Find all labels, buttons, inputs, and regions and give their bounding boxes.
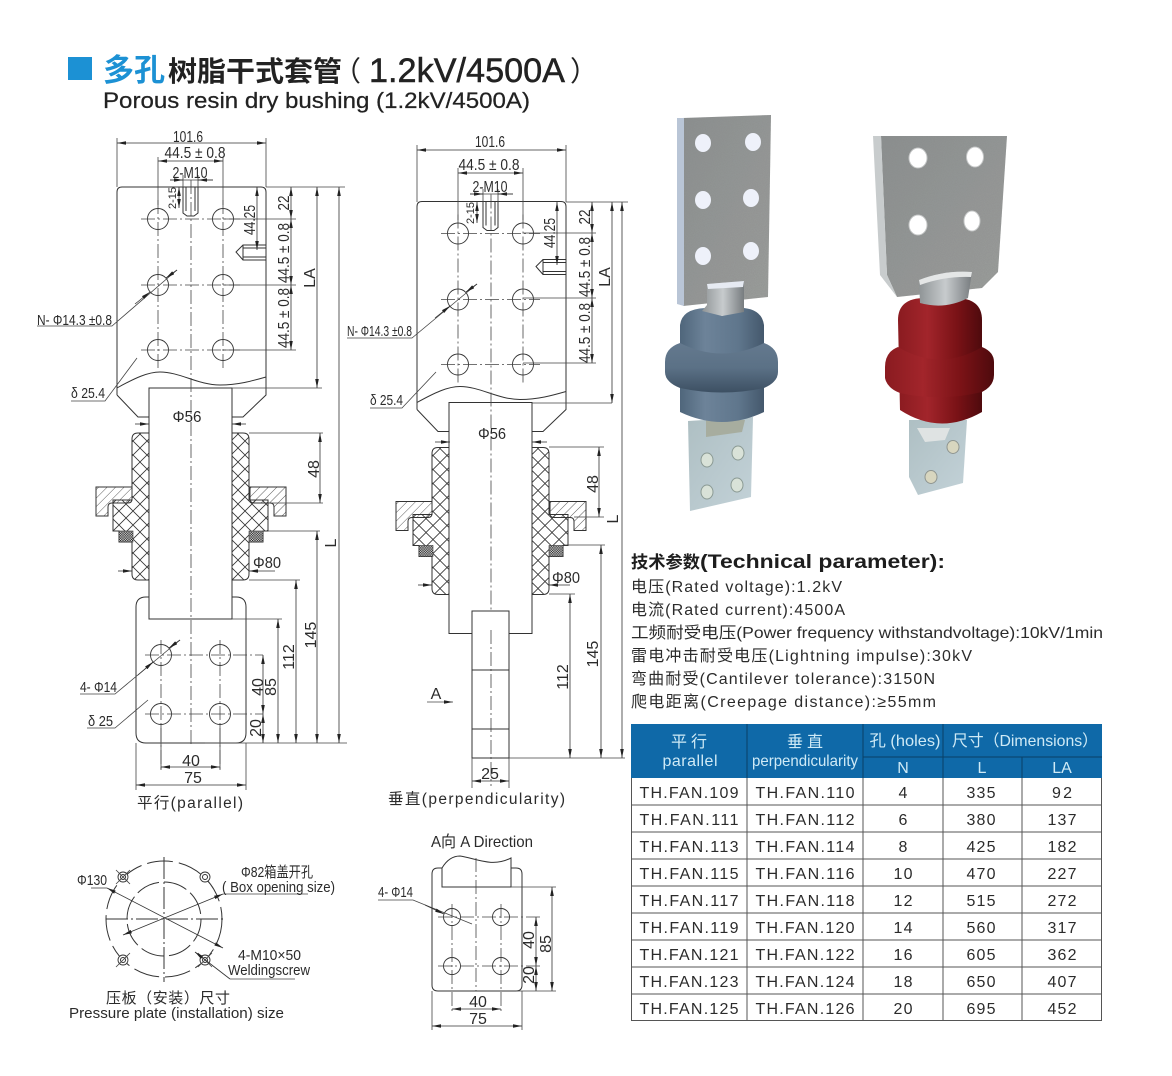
table rows: TH.FAN.126 bbox=[756, 1001, 855, 1018]
dimension labels: 44.5 ± 0.8 bbox=[577, 303, 594, 363]
table rows: 695 bbox=[966, 1001, 996, 1018]
dimension labels bbox=[347, 134, 622, 783]
view marker A: A bbox=[431, 686, 442, 703]
table rows: 407 bbox=[1048, 974, 1077, 991]
dimension lines bbox=[347, 145, 628, 788]
dimension labels: N- Φ14.3 ±0.8 bbox=[347, 323, 412, 340]
dimension labels: 44.5 ± 0.8 bbox=[458, 157, 520, 174]
table rows: 272 bbox=[1048, 893, 1077, 910]
table rows: 16 bbox=[894, 947, 913, 964]
table rows: 605 bbox=[966, 947, 996, 964]
heading: Chinese title: （ bbox=[333, 56, 361, 87]
table rows: 6 bbox=[899, 812, 908, 829]
dimension labels: 2-15 bbox=[167, 187, 179, 209]
table rows: 335 bbox=[966, 785, 996, 802]
heading: Chinese title: 树脂干式套管 bbox=[168, 56, 342, 87]
view marker A bbox=[427, 686, 453, 703]
labels: ( Box opening size) bbox=[222, 879, 335, 896]
photo: grey-blue bushing bbox=[665, 115, 778, 511]
technical parameters bbox=[631, 552, 1103, 711]
table rows: TH.FAN.125 bbox=[640, 1001, 739, 1018]
dimension labels: 4- Φ14 bbox=[80, 679, 117, 696]
dimension labels: 40 bbox=[182, 753, 200, 770]
table rows: TH.FAN.112 bbox=[756, 812, 855, 829]
heading: English title: Porous resin dry bushing (1.2kV/4500A) bbox=[103, 88, 530, 113]
parameters heading: 技术参数 bbox=[631, 552, 700, 572]
dimension labels: 2-M10 bbox=[472, 179, 508, 196]
lower terminal plate bbox=[136, 597, 263, 770]
caption: parallel: 平行(parallel) bbox=[137, 794, 243, 812]
lower terminal bar bbox=[472, 611, 509, 786]
lightning impulse: 雷电冲击耐受电压(Lightning impulse):30kV bbox=[631, 647, 972, 665]
table rows: TH.FAN.113 bbox=[640, 839, 739, 856]
dimension labels: 40 bbox=[250, 678, 267, 696]
table rows bbox=[640, 785, 1077, 1018]
dimension labels: L bbox=[605, 514, 622, 523]
parameters heading bbox=[631, 552, 945, 573]
heading: Chinese title: 1.2kV/4500A bbox=[369, 52, 565, 90]
dimension labels: 44.5 ± 0.8 bbox=[276, 288, 293, 348]
lower terminal plate bbox=[688, 417, 753, 511]
table rows: 380 bbox=[966, 812, 996, 829]
table header: 垂直 bbox=[787, 733, 823, 751]
dimension labels: 85 bbox=[263, 678, 280, 696]
table header: 孔 (holes) bbox=[870, 732, 940, 750]
table header: 平行 bbox=[671, 733, 707, 751]
plate outline and holes bbox=[432, 856, 540, 1012]
table rows: 12 bbox=[894, 893, 913, 910]
dimension labels: 145 bbox=[585, 641, 602, 667]
table rows: 317 bbox=[1048, 920, 1077, 937]
table rows: TH.FAN.120 bbox=[756, 920, 855, 937]
table rows: 8 bbox=[899, 839, 908, 856]
table header: N bbox=[897, 760, 909, 777]
plate circles and bolts bbox=[106, 857, 224, 982]
table rows: TH.FAN.122 bbox=[756, 947, 855, 964]
dimension labels: 2-15 bbox=[465, 202, 477, 224]
dimension labels: 44.5 ± 0.8 bbox=[164, 145, 226, 162]
labels bbox=[378, 833, 555, 1028]
table rows: TH.FAN.110 bbox=[756, 785, 855, 802]
caption: perpendicularity: 垂直(perpendicularity) bbox=[388, 790, 565, 808]
table rows: 20 bbox=[894, 1001, 913, 1018]
dimension labels: Φ80 bbox=[253, 555, 281, 572]
dimension labels: 112 bbox=[281, 644, 298, 670]
stud bbox=[919, 272, 972, 306]
labels: 20 bbox=[521, 966, 538, 984]
bushing section bbox=[396, 194, 586, 634]
dimension labels: L bbox=[323, 538, 340, 547]
cantilever tolerance: 弯曲耐受(Cantilever tolerance):3150N bbox=[631, 670, 935, 688]
table rows: 227 bbox=[1048, 866, 1077, 883]
table header: perpendicularity bbox=[752, 753, 858, 770]
labels: A向 A Direction bbox=[431, 833, 533, 851]
dimension labels: 75 bbox=[184, 770, 202, 787]
table rows: TH.FAN.123 bbox=[640, 974, 739, 991]
dimension lines bbox=[37, 138, 347, 790]
stud bbox=[702, 281, 744, 316]
table rows: TH.FAN.121 bbox=[640, 947, 739, 964]
dimension labels: 2-M10 bbox=[172, 165, 208, 182]
labels: 85 bbox=[538, 935, 555, 953]
dimension labels: 101.6 bbox=[173, 129, 203, 146]
table rows: TH.FAN.115 bbox=[640, 866, 739, 883]
dimension labels: 48 bbox=[585, 475, 602, 493]
table grid bbox=[631, 778, 1102, 1021]
title block bbox=[68, 52, 598, 113]
creepage distance: 爬电距离(Creepage distance):≥55mm bbox=[631, 693, 936, 711]
dimension labels: 22 bbox=[276, 195, 293, 210]
dimension labels: 112 bbox=[555, 664, 572, 690]
labels: Weldingscrew bbox=[228, 962, 310, 979]
dimension labels: 44.25 bbox=[242, 205, 259, 235]
table header bbox=[631, 724, 1102, 778]
labels: 75 bbox=[469, 1011, 487, 1028]
rated voltage: 电压(Rated voltage):1.2kV bbox=[631, 578, 842, 596]
icon: blue square bullet bbox=[68, 57, 92, 80]
table rows: 4 bbox=[899, 785, 908, 802]
table header: L bbox=[978, 760, 987, 777]
power frequency withstand voltage: 工频耐受电压(Power frequency withstandvoltage):10kV/1min bbox=[631, 624, 1103, 642]
table rows: 560 bbox=[966, 920, 996, 937]
dimension labels: 20 bbox=[248, 719, 265, 737]
heading: Chinese title bbox=[103, 52, 598, 90]
resin body bbox=[885, 298, 994, 424]
dimension labels: 22 bbox=[577, 209, 594, 224]
drawing: parallel bushing bbox=[37, 129, 347, 812]
drawing: perpendicular bushing bbox=[347, 134, 628, 808]
dimension labels: δ 25 bbox=[88, 713, 113, 730]
table rows: TH.FAN.117 bbox=[640, 893, 739, 910]
table rows: 10 bbox=[894, 866, 913, 883]
dimension labels bbox=[37, 129, 340, 787]
dimension labels: 44.5 ± 0.8 bbox=[276, 223, 293, 283]
table rows: 425 bbox=[966, 839, 996, 856]
labels: 4- Φ14 bbox=[378, 884, 413, 901]
labels: 4-M10×50 bbox=[238, 947, 301, 964]
dimension labels: 44.5 ± 0.8 bbox=[577, 237, 594, 297]
dimension labels: 48 bbox=[306, 460, 323, 478]
table header: 尺寸（Dimensions） bbox=[952, 732, 1098, 750]
dimension labels: LA bbox=[302, 268, 319, 288]
dimension labels: 44.25 bbox=[542, 218, 559, 248]
upper terminal plate bbox=[677, 115, 771, 306]
table rows: TH.FAN.124 bbox=[756, 974, 855, 991]
specification table bbox=[631, 724, 1102, 1021]
leader lines bbox=[91, 888, 308, 979]
dimension labels: Φ56 bbox=[478, 426, 506, 443]
table rows: 14 bbox=[894, 920, 913, 937]
labels: Φ130 bbox=[77, 872, 107, 889]
dimension labels: Φ56 bbox=[172, 409, 202, 426]
labels: 40 bbox=[521, 931, 538, 949]
labels: Pressure plate (installation) size bbox=[69, 1006, 284, 1022]
dimension labels: δ 25.4 bbox=[370, 392, 403, 409]
table rows: TH.FAN.118 bbox=[756, 893, 855, 910]
lower terminal plate bbox=[909, 420, 967, 495]
table header: parallel bbox=[662, 753, 718, 770]
resin body bbox=[665, 308, 778, 422]
table rows: 182 bbox=[1048, 839, 1077, 856]
table rows: TH.FAN.116 bbox=[756, 866, 855, 883]
dimension labels: Φ80 bbox=[552, 570, 580, 587]
parameters heading: (Technical parameter): bbox=[700, 552, 945, 573]
table rows: 650 bbox=[966, 974, 996, 991]
table rows: 18 bbox=[894, 974, 913, 991]
table rows: TH.FAN.109 bbox=[640, 785, 739, 802]
dimension labels: LA bbox=[597, 267, 614, 287]
labels: 压板（安装）尺寸 bbox=[106, 989, 230, 1007]
drawing: A direction view bbox=[378, 833, 556, 1030]
table rows: TH.FAN.119 bbox=[640, 920, 739, 937]
dimension labels: δ 25.4 bbox=[71, 385, 105, 402]
photo: red bushing bbox=[873, 136, 1007, 495]
bushing section bbox=[96, 180, 286, 620]
heading: Chinese title: 多孔 bbox=[103, 53, 165, 88]
table rows: TH.FAN.111 bbox=[640, 812, 739, 829]
dimension labels: 25 bbox=[481, 766, 499, 783]
table rows: 92 bbox=[1052, 785, 1072, 802]
dimension lines bbox=[378, 887, 556, 1030]
upper terminal plate bbox=[873, 136, 1007, 297]
dimension labels: 145 bbox=[303, 622, 320, 648]
drawing: pressure plate installation size bbox=[69, 857, 335, 1022]
labels bbox=[69, 864, 335, 1022]
labels: Φ82箱盖开孔 bbox=[241, 864, 313, 881]
table rows: TH.FAN.114 bbox=[756, 839, 855, 856]
dimension labels: N- Φ14.3 ±0.8 bbox=[37, 312, 112, 329]
table rows: 362 bbox=[1048, 947, 1077, 964]
table rows: 452 bbox=[1048, 1001, 1077, 1018]
table rows: 515 bbox=[966, 893, 996, 910]
table rows: 470 bbox=[966, 866, 996, 883]
table header: LA bbox=[1052, 760, 1072, 777]
table rows: 137 bbox=[1048, 812, 1077, 829]
rated current: 电流(Rated current):4500A bbox=[631, 601, 845, 619]
dimension labels: 101.6 bbox=[475, 134, 505, 151]
labels: 40 bbox=[469, 994, 487, 1011]
heading: Chinese title: ） bbox=[570, 56, 598, 87]
